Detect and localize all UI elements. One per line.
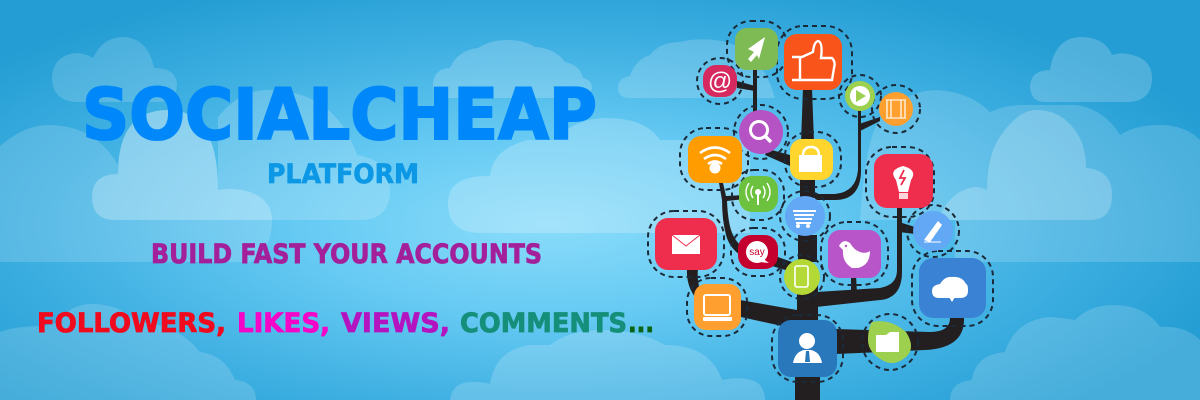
services line: COMMENTS — [460, 308, 627, 339]
icon: user — [778, 320, 837, 377]
icon: arrow cursor — [735, 28, 778, 70]
icon: film — [879, 92, 913, 126]
services line: FOLLOWERS, — [37, 308, 226, 339]
icon: play — [845, 81, 875, 111]
services line — [37, 308, 654, 339]
icon: shopping cart — [785, 196, 825, 236]
icon: cloud — [919, 258, 986, 318]
title: SOCIALCHEAP — [82, 74, 597, 156]
icon: padlock — [790, 139, 833, 180]
icon: laptop — [694, 284, 741, 330]
services line: ... — [628, 308, 654, 339]
icon: light bulb — [874, 154, 933, 208]
icon: at sign — [703, 65, 737, 97]
dashed icon outlines — [648, 21, 993, 382]
icon: antenna — [739, 176, 778, 212]
icon: smartphone — [784, 259, 820, 295]
tagline: BUILD FAST YOUR ACCOUNTS — [151, 239, 542, 270]
icon: search — [739, 110, 783, 154]
icon: thumbs up — [784, 34, 842, 90]
icon: bird — [828, 230, 881, 278]
icon: say bubble — [738, 235, 778, 269]
services line: VIEWS, — [341, 308, 450, 339]
icon: pencil — [913, 211, 953, 251]
tree trunk and branches — [687, 68, 964, 400]
icon: folder — [868, 321, 911, 363]
services line: LIKES, — [237, 308, 330, 339]
icon: at sign: @ — [708, 68, 732, 95]
icon: mail — [655, 218, 717, 270]
subtitle: PLATFORM — [267, 159, 419, 190]
icon: wifi — [688, 136, 742, 183]
icon: say bubble: say — [749, 247, 765, 258]
